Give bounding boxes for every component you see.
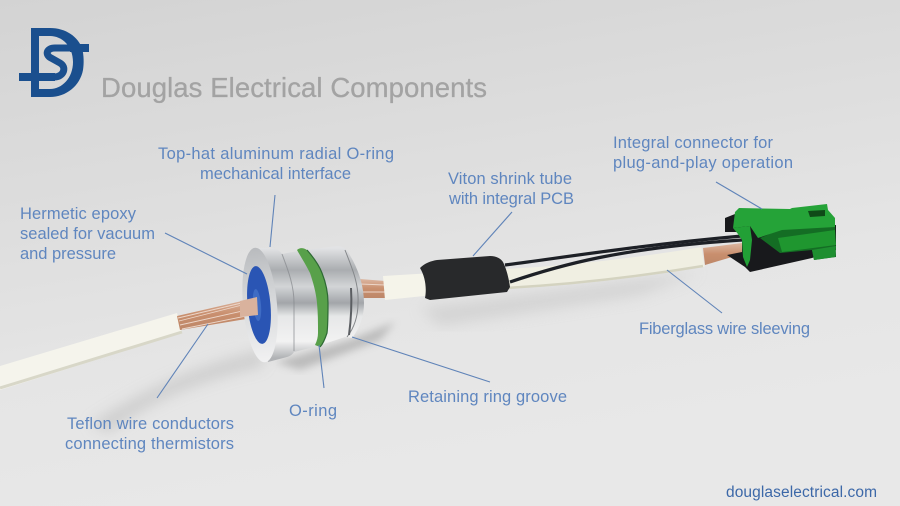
label: Viton shrink tube (448, 170, 574, 208)
green connector (725, 204, 836, 272)
Viton shrink tube (420, 256, 510, 300)
O-ring dark edge (307, 250, 328, 347)
copper at connector (703, 243, 742, 265)
cable collar (733, 226, 752, 267)
logo: DS monogram (19, 28, 89, 97)
shadows under assembly (90, 272, 700, 432)
left white wire sleeve (0, 313, 182, 390)
black housing silhouette (725, 214, 836, 272)
full body silhouette (258, 246, 364, 362)
callout leader lines (157, 182, 762, 398)
label: integral connector: Integral connector for (613, 134, 774, 152)
sleeve after flange (383, 273, 434, 300)
rear shoulder edge (345, 250, 358, 337)
label: hermetic epoxy: sealed for vacuum (20, 225, 155, 243)
label: Teflon conductors (65, 415, 234, 453)
lower green part (812, 246, 836, 260)
label: retaining ring groove: Retaining ring groove (408, 388, 567, 406)
blue potted epoxy (244, 265, 274, 345)
label: hermetic epoxy: and pressure (20, 245, 116, 263)
side clip (778, 230, 836, 252)
retaining ring groove shadow (349, 288, 351, 335)
label: top-hat interface: Top-hat aluminum radial O-ring (158, 145, 394, 163)
label: fiberglass sleeving: Fiberglass wire sleeving (639, 320, 810, 338)
label: top-hat interface (158, 145, 394, 183)
label: hermetic epoxy: Hermetic epoxy (20, 205, 137, 223)
exposed copper conductors, left (177, 298, 258, 330)
label: Teflon conductors: Teflon wire conductors (67, 415, 234, 433)
right copper conductors (360, 279, 385, 298)
label: Teflon conductors: connecting thermistors (65, 435, 234, 453)
front face rim (238, 246, 282, 364)
top slab (733, 204, 835, 238)
website URL: douglaselectrical.com (726, 484, 877, 501)
label: hermetic epoxy (20, 205, 155, 263)
green O-ring (297, 248, 328, 347)
flange back edge (282, 254, 294, 351)
label: O-ring: O-ring (289, 402, 337, 420)
label: Viton shrink tube: Viton shrink tube (448, 170, 572, 188)
label: integral connector: plug-and-play operation (613, 154, 793, 172)
black wires (505, 236, 742, 282)
main fiberglass sleeve (505, 257, 703, 288)
dark green backing (760, 224, 836, 260)
latch hole (808, 210, 825, 217)
radial O-ring metal body (238, 246, 364, 364)
label: top-hat interface: mechanical interface (200, 165, 351, 183)
title: Douglas Electrical Components (101, 72, 487, 103)
copper entering the epoxy (240, 297, 258, 317)
label: integral connector (613, 134, 793, 172)
label: Viton shrink tube: with integral PCB (448, 190, 574, 208)
